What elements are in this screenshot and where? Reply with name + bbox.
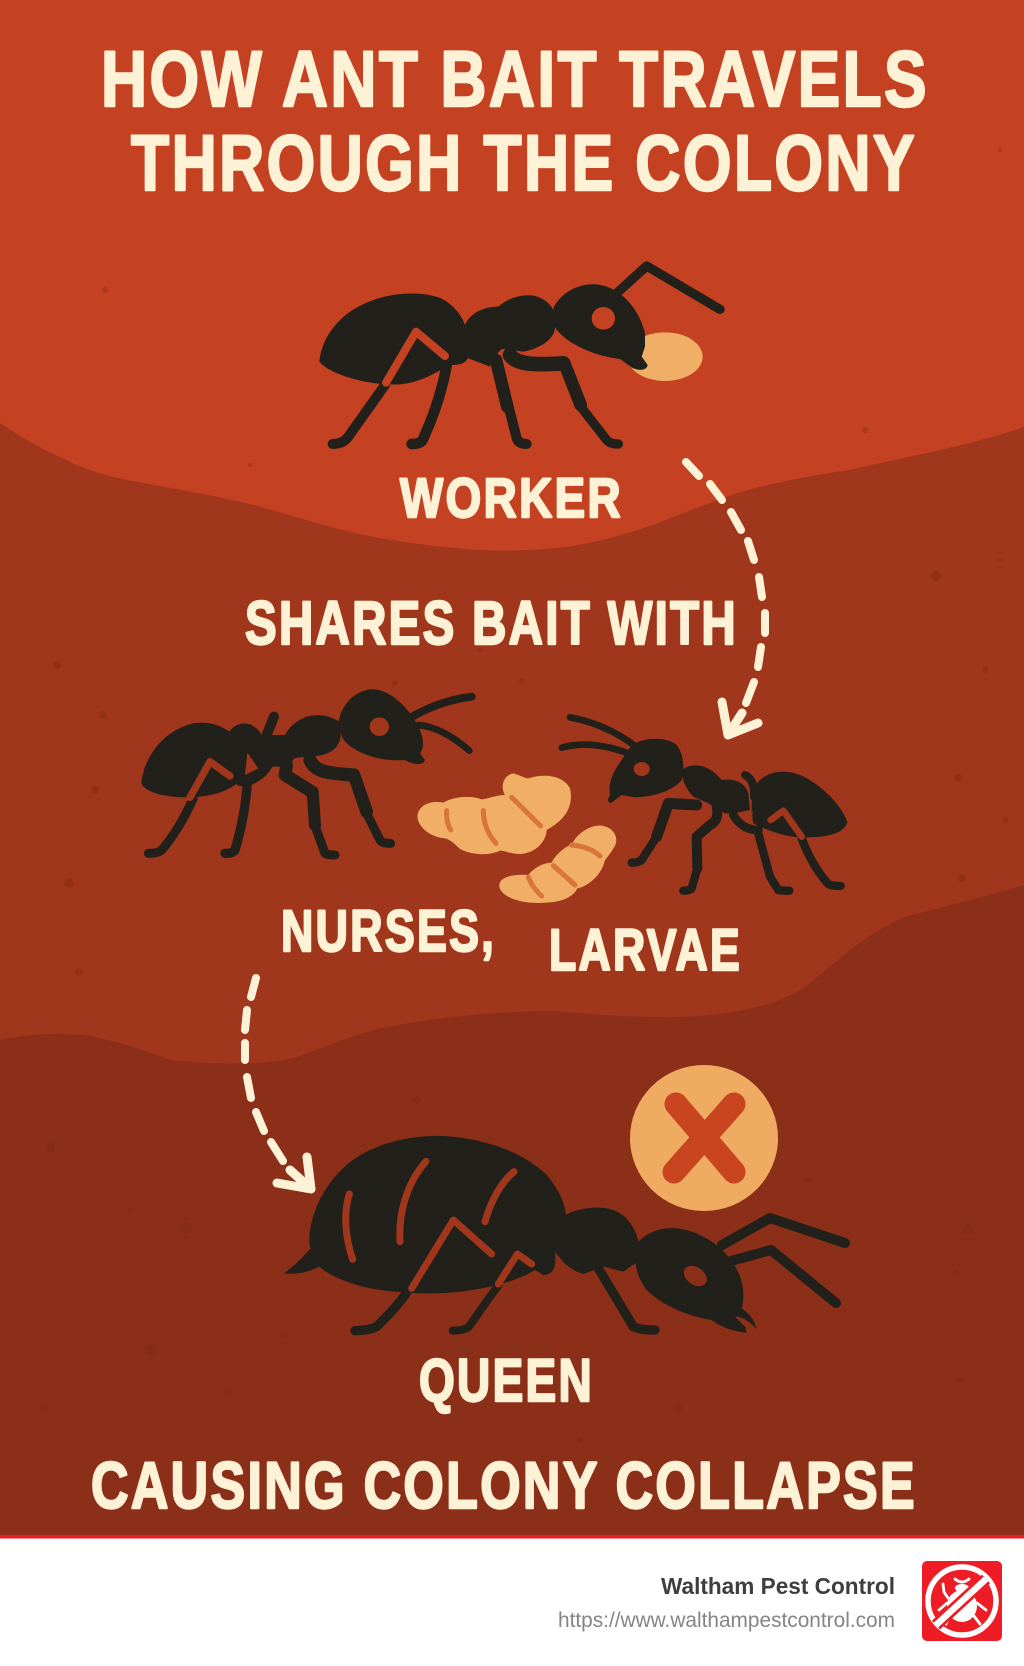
label: nurses: NURSES, bbox=[281, 899, 496, 964]
worker eye bbox=[592, 307, 615, 330]
panel: middle soil layer bbox=[0, 423, 1024, 1537]
brand name: Waltham Pest Control bbox=[661, 1573, 895, 1599]
queen ant bbox=[284, 1136, 845, 1333]
footer bbox=[0, 1535, 1024, 1666]
panel: bottom soil layer bbox=[0, 885, 1024, 1537]
worker leg highlight bbox=[386, 332, 445, 383]
label: shares bait with: SHARES BAIT WITH bbox=[245, 589, 738, 657]
worker head bbox=[552, 284, 648, 370]
label: queen: QUEEN bbox=[419, 1347, 594, 1414]
right nurse ant bbox=[562, 717, 847, 891]
larva one bbox=[417, 773, 571, 854]
worker legs bbox=[333, 266, 720, 444]
label: larvae: LARVAE bbox=[549, 918, 742, 983]
soil speckles bbox=[40, 148, 1008, 1443]
title bbox=[101, 34, 929, 207]
dashed arrow: nurses to queen bbox=[245, 978, 311, 1189]
icon: x in circle bbox=[630, 1065, 778, 1211]
worker ant with bait bbox=[319, 266, 720, 444]
brand url: https://www.walthampestcontrol.com bbox=[558, 1609, 895, 1632]
label: worker: WORKER bbox=[400, 466, 623, 529]
bait bbox=[627, 332, 703, 381]
dashed arrow: worker to nurses bbox=[686, 462, 765, 735]
larva two bbox=[499, 825, 616, 903]
left nurse ant bbox=[141, 689, 472, 855]
icon: no bugs logo bbox=[922, 1561, 1002, 1641]
worker body bbox=[319, 294, 468, 384]
larvae bbox=[417, 773, 616, 903]
